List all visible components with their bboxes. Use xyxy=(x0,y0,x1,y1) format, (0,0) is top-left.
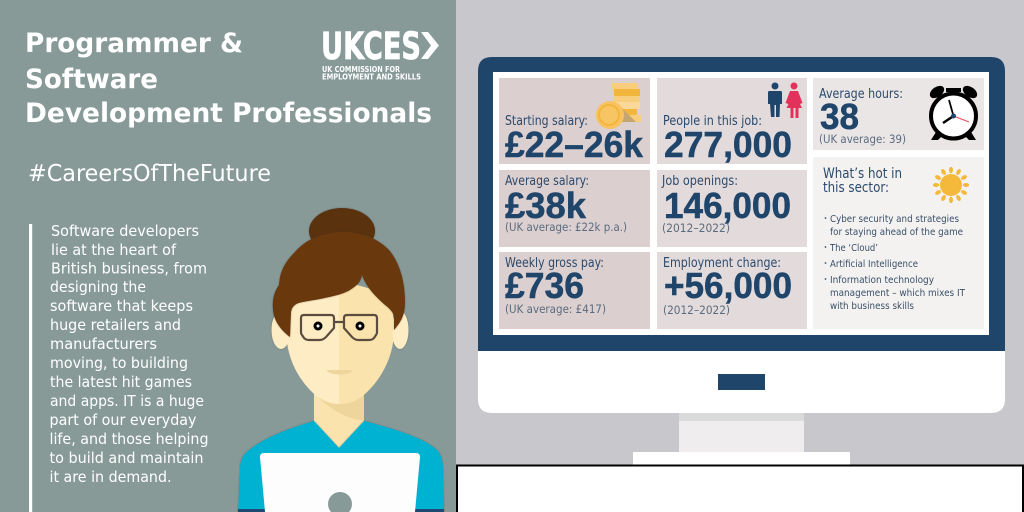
card: what's hot: What’s hot in xyxy=(823,166,902,182)
list: hot topics xyxy=(825,214,965,312)
title: Development Professionals xyxy=(25,98,432,129)
logo: UKCES: UK COMMISSION FOR xyxy=(322,65,400,74)
illustration: woman with laptop xyxy=(238,208,444,512)
face xyxy=(287,280,339,404)
body text xyxy=(50,222,208,486)
card: job openings: Job openings: xyxy=(661,174,738,189)
card: people in this job: People in this job: xyxy=(663,114,762,129)
background: right panel xyxy=(456,0,1024,512)
body text: and apps. IT is a huge xyxy=(50,392,204,410)
hashtag: #CareersOfTheFuture xyxy=(28,161,271,187)
logo: UKCES: UKCES xyxy=(321,25,421,68)
card: starting salary: Starting salary: xyxy=(505,114,588,129)
body text: moving, to building xyxy=(50,354,188,372)
card: weekly gross pay: (UK average: £417) xyxy=(505,302,606,316)
card: starting salary: £22–26k xyxy=(505,124,644,165)
list: hot topics: Information technology xyxy=(830,275,934,286)
card: what's hot: this sector: xyxy=(823,180,889,196)
card: employment change: (2012–2022) xyxy=(663,303,730,317)
stand xyxy=(633,413,850,465)
body text: manufacturers xyxy=(50,335,157,353)
body text: part of our everyday xyxy=(50,411,197,429)
card: average salary: £38k xyxy=(505,185,587,226)
panel: left intro xyxy=(0,0,456,512)
card: people in this job: 277,000 xyxy=(664,124,792,165)
body text: Software developers xyxy=(51,222,199,240)
card: job openings xyxy=(657,170,807,247)
logo: UKCES xyxy=(321,25,439,82)
vertical rule xyxy=(29,224,32,512)
list: hot topics: with business skills xyxy=(830,301,914,312)
laptop xyxy=(260,453,420,512)
monitor body xyxy=(478,351,1005,413)
body text: huge retailers and xyxy=(50,316,181,334)
icon: sun xyxy=(933,167,969,203)
body text: software that keeps xyxy=(50,297,193,315)
list: hot topics: The ‘Cloud’ xyxy=(829,243,878,254)
ears xyxy=(272,311,408,349)
card: starting salary xyxy=(499,78,650,165)
card: average hours xyxy=(813,78,984,150)
neck xyxy=(314,375,364,453)
card: weekly gross pay: Weekly gross pay: xyxy=(505,256,604,271)
card: average salary xyxy=(499,170,650,247)
icon: man and woman xyxy=(768,82,802,118)
screen xyxy=(493,72,989,335)
icon: coins xyxy=(596,83,641,129)
body text: it are in demand. xyxy=(50,468,172,486)
card: weekly gross pay: £736 xyxy=(505,265,584,306)
card: average hours: (UK average: 39) xyxy=(819,132,906,146)
card: what's hot xyxy=(813,157,984,329)
card: job openings: (2012–2022) xyxy=(662,221,730,235)
list: hot topics: Cyber security and strategies xyxy=(830,214,959,225)
title xyxy=(25,28,432,129)
card: weekly gross pay xyxy=(499,252,650,329)
hair xyxy=(273,232,405,337)
list: hot topics: Artificial Intelligence xyxy=(830,259,918,270)
hair bun xyxy=(309,208,375,254)
glasses xyxy=(301,315,377,340)
body text: British business, from xyxy=(51,260,207,278)
monitor button xyxy=(718,374,765,390)
body text: life, and those helping xyxy=(50,430,208,448)
card: employment change: +56,000 xyxy=(664,265,792,306)
card: average hours: Average hours: xyxy=(819,87,903,102)
shirt xyxy=(238,421,444,512)
body text: lie at the heart of xyxy=(51,241,177,259)
card: job openings: 146,000 xyxy=(664,185,791,226)
list: hot topics: for staying ahead of the game xyxy=(830,227,963,238)
body text: the latest hit games xyxy=(50,373,192,391)
list: hot topics: management – which mixes IT xyxy=(830,288,965,299)
monitor xyxy=(478,57,1005,465)
icon: alarm clock xyxy=(928,83,979,140)
card: average hours: 38 xyxy=(820,96,859,137)
card: average salary: (UK average: £22k p.a.) xyxy=(505,220,627,234)
card: employment change xyxy=(657,252,807,329)
card: people in this job xyxy=(657,78,807,165)
body text: to build and maintain xyxy=(50,449,204,467)
eyes xyxy=(314,322,364,330)
logo: UKCES: EMPLOYMENT AND SKILLS xyxy=(322,72,421,82)
mouth xyxy=(326,370,353,374)
title: Programmer & xyxy=(25,28,243,59)
empty white box at bottom right xyxy=(457,466,1023,512)
body text: designing the xyxy=(50,278,146,296)
title: Software xyxy=(25,64,158,95)
card: employment change: Employment change: xyxy=(663,256,781,271)
card: average salary: Average salary: xyxy=(505,174,589,189)
